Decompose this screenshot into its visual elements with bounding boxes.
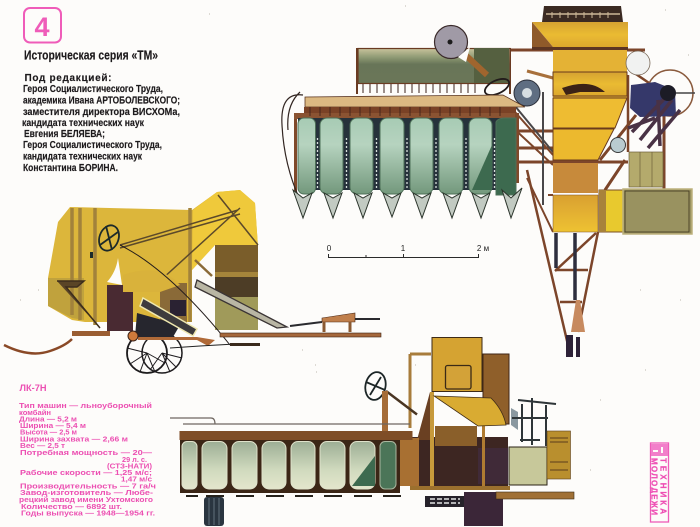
text block: editors: кандидата технических наук [23, 152, 143, 162]
cone of the drawbar [571, 300, 585, 332]
hopper lower sections [215, 245, 258, 330]
blue machinery [511, 398, 556, 446]
yellow chute [434, 396, 506, 426]
crop divider spikes [293, 188, 522, 218]
main beam [72, 331, 381, 348]
white round lamp [626, 51, 650, 75]
text block: specifications: Высота — 2,5 м [20, 428, 77, 436]
engine loop pipe [647, 70, 693, 116]
text block: specifications [19, 401, 156, 518]
badge: series number 4: 4 [34, 12, 50, 42]
cart wheel [127, 333, 182, 373]
belt highlights [318, 138, 494, 188]
scale bar: 2 м [477, 244, 489, 253]
text block: specifications: 1,47 м/с [121, 474, 152, 484]
text block: editors: кандидата технических наук [22, 118, 145, 129]
handrail [170, 418, 410, 424]
frame bars [72, 208, 190, 325]
engine block [628, 82, 695, 148]
steering wheel side [90, 223, 122, 255]
dark hitch ends [566, 335, 580, 357]
text block: editors: академика Ивана АРТОБОЛЕВСКОГО; [23, 96, 180, 106]
logo: Техника молодежи: ТЕХНИКА [658, 458, 668, 514]
steering column [382, 391, 417, 432]
top view of the combine [282, 6, 695, 357]
tail curve [4, 339, 72, 353]
conveyor chute [135, 298, 197, 337]
header brown frame [282, 92, 519, 200]
gatherer dark belts [298, 118, 516, 190]
steering wheel top view [482, 76, 512, 98]
dark backing [180, 440, 400, 493]
central mechanism [107, 270, 186, 331]
text block: editors: Под редакцией: [24, 73, 112, 84]
header brown bar [180, 431, 412, 440]
title: Историческая серия «ТМ» [24, 48, 158, 62]
text block: specifications: Производительность — 7 га/ч [20, 482, 156, 490]
text block: specifications: Потребная мощность — 20— [20, 448, 153, 457]
purple floor step [464, 492, 503, 526]
text block: editors: Константина БОРИНА. [23, 163, 118, 174]
logo: Техника молодежи: МОЛОДЕЖИ [650, 458, 658, 515]
grain column [532, 22, 628, 232]
side view of the combine [4, 190, 381, 373]
white cut-out [107, 245, 215, 285]
lower guards [186, 495, 401, 497]
grid step [425, 496, 464, 507]
text block: specifications: Рабочие скорости — 1,25 м/с; [20, 468, 152, 477]
pale green box [509, 447, 547, 485]
scale bar: 0 [327, 244, 332, 253]
text block: editors [22, 73, 180, 174]
gatherer panels [298, 118, 516, 195]
wood platform [305, 95, 525, 107]
yellow side panels [547, 431, 570, 479]
frame legs [510, 50, 668, 345]
inclined rods [120, 245, 287, 345]
blue fan [514, 80, 540, 106]
badge: series number 4 [24, 8, 61, 42]
text block: specifications: Ширина захвата — 2,66 м [20, 434, 129, 444]
yellow tank [432, 338, 482, 392]
text block: specifications: Годы выпуска — 1948—1954 гг. [21, 508, 155, 518]
wood box small [629, 152, 663, 187]
text block: specifications: Завод-изготовитель — Любе- [20, 488, 154, 497]
text block: specifications: рецкий завод имени Ухтомского [19, 495, 153, 504]
text block: specifications: Ширина — 5,4 м [20, 421, 86, 430]
floor beam [410, 486, 510, 490]
steering wheel [363, 370, 388, 402]
hopper top grid [542, 6, 623, 22]
text block: specifications: Вес — 2,5 т [20, 441, 65, 450]
text block: editors: заместителя директора ВИСХОМа, [23, 107, 180, 118]
text block: specifications: комбайн [19, 408, 51, 417]
text block: specifications: Количество — 6892 шт. [21, 502, 122, 511]
bottom side view combine [170, 338, 574, 526]
hitch [290, 313, 380, 332]
grey globe [610, 138, 626, 152]
wood box large [623, 189, 692, 234]
yellow body [48, 190, 258, 322]
text block: editors: Евгения БЕЛЯЕВА; [24, 129, 105, 140]
side yellow box [599, 190, 623, 232]
text block: specifications: 29 л. с. [122, 455, 147, 464]
header rear wood panel [357, 48, 510, 94]
scale bar: 1 [401, 244, 406, 253]
text block: specifications: Длина — 5,2 м [19, 414, 77, 424]
gatherer panels side [182, 442, 396, 489]
text block: specifications: Тип машин — льноуборочный [19, 401, 152, 410]
lower brown casing [160, 283, 187, 323]
logo: Техника молодежи [650, 443, 668, 522]
seat [57, 281, 100, 328]
tyre [204, 497, 224, 526]
text block: editors: Героя Социалистического Труда, [23, 84, 163, 95]
scale bar [327, 244, 489, 258]
grey disc and arm [434, 26, 487, 75]
text block: editors: Героя Социалистического Труда, [23, 140, 162, 151]
text block: specifications: (СТЗ-НАТИ) [107, 462, 153, 470]
right platform [496, 492, 574, 499]
brown body behind [400, 354, 509, 488]
text block: model name: ЛК-7Н [20, 383, 47, 394]
